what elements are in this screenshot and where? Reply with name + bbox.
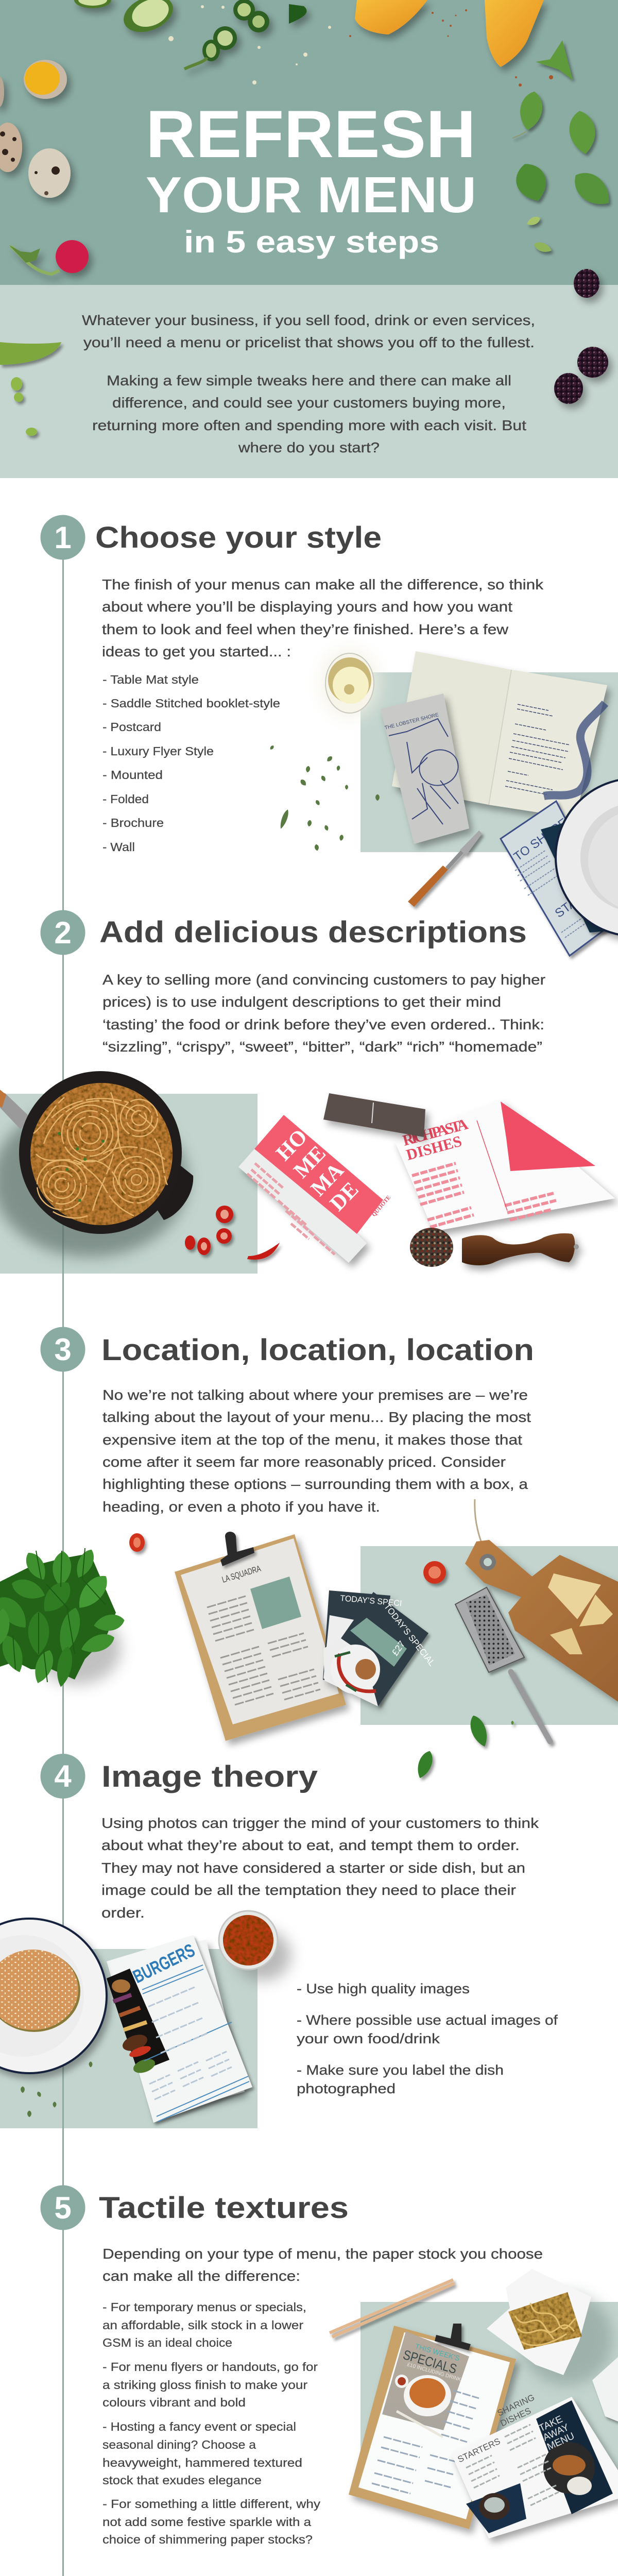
white paper stack <box>592 2357 618 2421</box>
hero food: blackberries <box>554 269 608 404</box>
todays special cards: TODAY’S SPECIAL <box>382 1602 437 1668</box>
todays special cards <box>323 1590 437 1706</box>
specials clipboard menu <box>349 2324 516 2529</box>
hero food: jalapeno slices <box>184 0 306 69</box>
loose basil leaves <box>414 1713 513 1781</box>
rolled linen napkin <box>323 1093 425 1137</box>
timeline line <box>62 556 64 2576</box>
intro text: Whatever your business, if you sell food, drink or even services, <box>82 312 535 328</box>
crab menu card <box>381 693 469 844</box>
pepper mill <box>462 1233 579 1265</box>
step 1 list of styles: - Postcard <box>102 720 161 734</box>
step 2 paragraph: ‘tasting’ the food or drink before they’ve even ordered.. Think: <box>102 1016 544 1032</box>
intro band background <box>0 285 618 478</box>
homemade menu card: HO <box>271 1125 312 1165</box>
step 3 number badge: 3 <box>54 1332 72 1367</box>
burger menu sheets <box>107 1935 252 2123</box>
step 5 bullet list: - For something a little different, why <box>102 2497 321 2511</box>
step 4 bullet list: - Make sure you label the dish <box>297 2062 504 2078</box>
step 3 paragraph: expensive item at the top of the menu, it makes those that <box>102 1432 522 1448</box>
step 2 paragraph: “sizzling”, “crispy”, “sweet”, “bitter”, “dark” “rich” “homemade” <box>102 1039 542 1055</box>
intro food: pea pod and peas <box>0 342 61 436</box>
menu text lines <box>505 704 570 794</box>
green panel behind step 5 images <box>360 2302 618 2482</box>
step 5 bullet list: seasonal dining? Choose a <box>102 2438 256 2451</box>
step 4 bullet list <box>297 1981 558 2096</box>
step 2 paragraph: A key to selling more (and convincing customers to pay higher <box>102 972 545 988</box>
step 4 number badge <box>40 1754 85 1799</box>
take away trifold menu: STARTERS <box>456 2436 502 2465</box>
noodle box <box>487 2269 613 2385</box>
la squadra clipboard menu <box>175 1532 346 1741</box>
step 5 bullet list: not add some festive sparkle with a <box>102 2515 311 2529</box>
step 5 bullet list: GSM is an ideal choice <box>102 2336 232 2349</box>
thyme specks <box>269 744 380 851</box>
peppercorn pile <box>410 1228 453 1267</box>
step 1 list of styles: - Folded <box>102 792 149 806</box>
rich pasta dishes menu <box>394 1100 615 1231</box>
green panel behind step 4 images <box>0 1949 258 2128</box>
rich pasta dishes menu: RICH PASTA <box>401 1115 470 1149</box>
icon: wine glass <box>319 647 381 719</box>
step 1 paragraph: them to look and feel when they’re finished. Here’s a few <box>102 621 509 637</box>
take away trifold menu: SHARING <box>496 2393 536 2418</box>
step 4 bullet list: - Where possible use actual images of <box>297 2012 558 2028</box>
to share menu sheet: TO SHARE <box>511 816 570 864</box>
step 5 bullet list: choice of shimmering paper stocks? <box>102 2533 313 2546</box>
spaghetti strands <box>33 1092 167 1218</box>
step 4 heading: Image theory <box>101 1760 318 1793</box>
step 1 heading: Choose your style <box>95 521 382 554</box>
step 4 bullet list: your own food/drink <box>297 2031 440 2046</box>
thyme specks near plate <box>21 2061 92 2117</box>
step 1 paragraph: ideas to get you started... : <box>102 643 291 659</box>
step 1 list of styles: - Brochure <box>102 816 164 829</box>
step 4 paragraph: order. <box>101 1905 145 1921</box>
basil leaf veins <box>13 1548 106 1682</box>
basil bunch <box>0 1547 126 1688</box>
step 2 number badge: 2 <box>54 916 72 950</box>
step 3 paragraph: heading, or even a photo if you have it. <box>102 1499 380 1515</box>
todays special cards: £27 <box>390 1639 407 1657</box>
hero food: eggs <box>0 60 71 198</box>
step 2 number badge <box>40 910 85 955</box>
step 3 paragraph: come after it seem far more reasonably priced. Consider <box>102 1454 506 1470</box>
step 5 bullet list: a striking gloss finish to make your <box>102 2378 307 2392</box>
hero food: cucumber slices <box>74 0 178 39</box>
step 1 list of styles: - Table Mat style <box>102 673 199 686</box>
step 1 list of styles: - Wall <box>102 840 135 854</box>
hero title: REFRESH <box>146 96 476 172</box>
step 4 number badge: 4 <box>54 1759 72 1793</box>
step 2 heading: Add delicious descriptions <box>99 916 527 949</box>
intro text: where do you start? <box>238 439 380 455</box>
burger menu sheets: BURGERS <box>130 1939 198 1987</box>
to share menu sheet: STARTERS <box>553 871 613 921</box>
take away trifold menu: DISHES <box>499 2406 533 2429</box>
step 1 list of styles: - Luxury Flyer Style <box>102 744 214 758</box>
spaghetti pan <box>0 1071 193 1257</box>
homemade menu card <box>238 1115 392 1263</box>
hero title: in 5 easy steps <box>184 225 439 259</box>
step 2 paragraph <box>102 972 545 1055</box>
take away trifold menu: MENU <box>545 2431 576 2453</box>
step 4 paragraph: image could be all the temptation they need to place their <box>101 1882 516 1898</box>
step 4 paragraph: Using photos can trigger the mind of your customers to think <box>101 1815 539 1831</box>
step 1 paragraph <box>102 577 544 659</box>
rich pasta dishes menu: DISHES <box>404 1132 464 1164</box>
intro text: difference, and could see your customers buying more, <box>112 395 506 411</box>
hero food: radish <box>9 240 89 274</box>
step 1 paragraph: The finish of your menus can make all the difference, so think <box>102 577 544 592</box>
step 5 heading: Tactile textures <box>99 2191 349 2225</box>
step 5 number badge: 5 <box>54 2191 72 2225</box>
step 4 bullet list: - Use high quality images <box>297 1981 470 1996</box>
fork <box>408 831 482 907</box>
tomato pieces <box>129 1533 446 1584</box>
step 5 paragraph: can make all the difference: <box>102 2268 300 2284</box>
step 5 bullet list: heavyweight, hammered textured <box>102 2456 302 2469</box>
step 5 number badge <box>40 2185 85 2230</box>
take away trifold menu <box>451 2393 618 2538</box>
homemade menu card: MA <box>306 1158 349 1201</box>
homemade menu card: ME <box>289 1141 331 1183</box>
step 1 list of styles <box>102 673 280 854</box>
step 4 paragraph <box>101 1815 539 1921</box>
step 5 bullet list: - For menu flyers or handouts, go for <box>102 2360 318 2374</box>
step 4 paragraph: They may not have considered a starter or side dish, but an <box>101 1860 525 1876</box>
intro text <box>82 312 535 455</box>
crab menu card: THE LOBSTER SHORE <box>384 712 439 731</box>
step 5 paragraph: Depending on your type of menu, the paper stock you choose <box>102 2246 543 2262</box>
step 3 paragraph <box>102 1387 531 1515</box>
hero food: spice and sesame specks <box>168 5 553 87</box>
specials clipboard menu: £10 INCLUDING DRINK <box>406 2362 462 2383</box>
specials clipboard menu: THIS WEEK’S <box>414 2342 461 2363</box>
step 3 paragraph: highlighting these options – surrounding them with a box, a <box>102 1476 528 1492</box>
intro text: you’ll need a menu or pricelist that shows you off to the fullest. <box>83 334 535 350</box>
burger on plate <box>0 1919 107 2073</box>
homemade menu card: DE <box>325 1178 364 1216</box>
hero background <box>0 0 618 285</box>
step 1 paragraph: about where you’ll be displaying yours and how you want <box>102 599 512 615</box>
hero title: YOUR MENU <box>146 166 476 223</box>
octopus illustration <box>544 703 605 796</box>
step 3 heading: Location, location, location <box>101 1333 534 1367</box>
step 5 bullet list: stock that exudes elegance <box>102 2473 262 2487</box>
hero food: mango wedges <box>355 0 544 67</box>
homemade menu card: QUIJOTE <box>371 1194 392 1218</box>
step 3 number badge <box>40 1327 85 1371</box>
step 1 number badge <box>40 515 85 560</box>
step 1 list of styles: - Mounted <box>102 768 163 782</box>
step 4 bullet list: photographed <box>297 2081 396 2096</box>
chillies <box>185 1206 280 1260</box>
step 1 number badge: 1 <box>54 520 72 555</box>
step 5 bullet list: - For temporary menus or specials, <box>102 2300 306 2314</box>
green panel behind step 2 images <box>0 1094 258 1274</box>
intro text: Making a few simple tweaks here and there can make all <box>107 372 511 388</box>
take away trifold menu: TAKE <box>537 2414 564 2434</box>
take away trifold menu: AWAY <box>541 2422 571 2444</box>
step 5 paragraph <box>102 2246 543 2284</box>
step 1 list of styles: - Saddle Stitched booklet-style <box>102 697 280 710</box>
hero title <box>146 96 476 259</box>
wooden cutting board with cheese <box>465 1499 618 1702</box>
intro text: returning more often and spending more with each visit. But <box>92 417 526 433</box>
open menu booklet <box>392 651 607 818</box>
step 5 bullet list: - Hosting a fancy event or special <box>102 2420 296 2433</box>
step 3 paragraph: No we’re not talking about where your premises are – we’re <box>102 1387 528 1403</box>
step 3 paragraph: talking about the layout of your menu... By placing the most <box>102 1409 531 1425</box>
cheese grater <box>455 1587 550 1741</box>
green panel behind step 3 images <box>360 1546 618 1725</box>
chopsticks <box>330 2280 454 2337</box>
todays special cards: TODAY’S SPECI <box>340 1594 402 1608</box>
salsa dip bowl <box>219 1911 291 1981</box>
dinner plate and napkin <box>541 778 618 936</box>
green panel behind step 1 images <box>360 672 618 852</box>
specials clipboard menu: SPECIALS <box>401 2347 458 2377</box>
step 2 paragraph: prices) is to use indulgent descriptions to get their mind <box>102 994 501 1010</box>
step 5 bullet list: colours vibrant and bold <box>102 2396 246 2409</box>
step 5 bullet list: an affordable, silk stock in a lower <box>102 2318 303 2332</box>
la squadra clipboard menu: LA SQUADRA <box>221 1564 262 1585</box>
step 4 paragraph: about what they’re about to eat, and tempt them to order. <box>101 1837 520 1853</box>
step 5 bullet list <box>102 2300 321 2546</box>
hero food: mint leaves <box>511 40 617 255</box>
to share menu sheet <box>501 801 618 956</box>
